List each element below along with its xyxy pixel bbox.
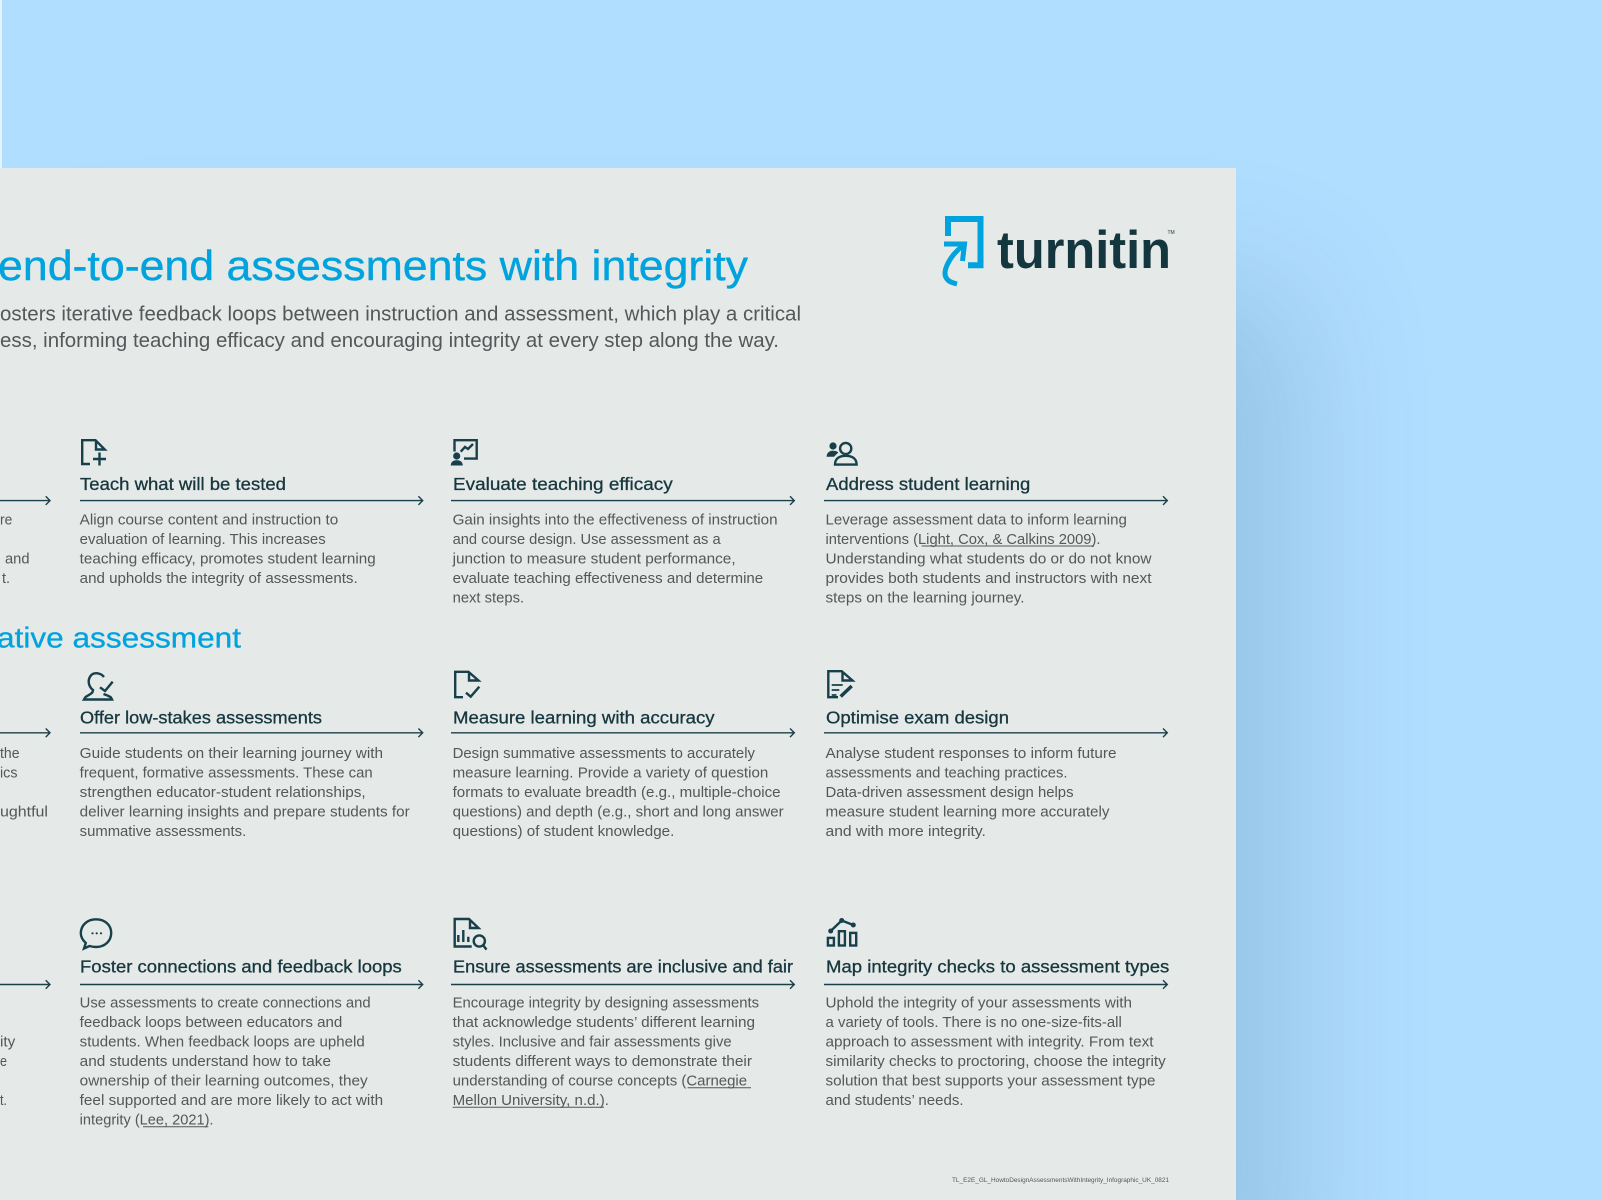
- panel: offer low-stakes assessments: [80, 673, 423, 840]
- logo: turnitin: [944, 219, 1175, 284]
- arrow: [451, 980, 794, 989]
- heading: Offer low-stakes assessments: [80, 708, 322, 728]
- body text: integrity (Lee, 2021).: [80, 1112, 214, 1128]
- panel: clipped left column row 1: re: [0, 512, 12, 528]
- body text: interventions (Light, Cox, & Calkins 2009).: [826, 532, 1100, 548]
- body text: a variety of tools. There is no one-size-fits-all: [826, 1015, 1122, 1031]
- body text: strengthen educator-student relationships,: [80, 785, 366, 801]
- panel: measure learning with accuracy: [451, 672, 794, 840]
- body text: feel supported and are more likely to act with: [80, 1093, 383, 1109]
- body text: assessments and teaching practices.: [826, 766, 1068, 782]
- body text: Mellon University, n.d.).: [453, 1093, 609, 1109]
- icon: presenter with chart: [451, 440, 477, 466]
- logo wordmark: turnitin: [997, 221, 1171, 280]
- body text: ownership of their learning outcomes, they: [80, 1074, 369, 1090]
- body text: measure student learning more accurately: [826, 804, 1110, 820]
- heading: Ensure assessments are inclusive and fair: [453, 957, 793, 977]
- body text: and upholds the integrity of assessments.: [80, 571, 358, 587]
- heading: Teach what will be tested: [80, 474, 286, 494]
- body text: next steps.: [453, 590, 524, 606]
- trademark: TM: [1168, 230, 1175, 236]
- arrow: [80, 496, 423, 505]
- body text: Uphold the integrity of your assessments with: [826, 996, 1132, 1012]
- body text: teaching efficacy, promotes student learning: [80, 551, 376, 567]
- icon: document plus: [82, 440, 106, 466]
- section heading: ative assessment: [0, 622, 241, 654]
- panel: teach what will be tested: [80, 440, 423, 587]
- body text: frequent, formative assessments. These can: [80, 766, 373, 782]
- arrow: [451, 496, 794, 505]
- icon: report with magnifier: [455, 919, 486, 950]
- left edge strip: [0, 0, 2, 168]
- body text: students different ways to demonstrate their: [453, 1054, 752, 1070]
- panel: clipped left column row 1: [0, 496, 50, 587]
- body text: and course design. Use assessment as a: [453, 532, 721, 548]
- body text: Understanding what students do or do not know: [826, 551, 1152, 567]
- logo icon: [944, 219, 980, 284]
- body text: and students understand how to take: [80, 1054, 331, 1070]
- panel: map integrity checks to assessment types: [824, 918, 1170, 1109]
- panel: ensure assessments are inclusive and fair: [451, 919, 794, 1109]
- body text: that acknowledge students’ different learning: [453, 1015, 755, 1031]
- heading: Measure learning with accuracy: [453, 708, 715, 728]
- panel: address student learning: [824, 442, 1167, 606]
- icon: bar chart with trend: [828, 918, 856, 946]
- panel: clipped left column row 2: ughtful: [0, 804, 48, 820]
- body text: [80, 996, 383, 1128]
- panel: foster connections and feedback loops: [80, 919, 423, 1128]
- body text: Analyse student responses to inform future: [826, 746, 1116, 762]
- panel: clipped left column row 3: e: [0, 1054, 7, 1070]
- heading: Evaluate teaching efficacy: [453, 474, 673, 494]
- body text: approach to assessment with integrity. From text: [826, 1034, 1154, 1050]
- body text: Guide students on their learning journey with: [80, 746, 383, 762]
- body text: [80, 746, 410, 840]
- panel: clipped left column row 2: ics: [0, 766, 18, 782]
- body text: students. When feedback loops are upheld: [80, 1034, 365, 1050]
- panel: evaluate teaching efficacy: [451, 440, 794, 606]
- body text: similarity checks to proctoring, choose the integrity: [826, 1054, 1167, 1070]
- panel: clipped left column row 1: and: [5, 551, 30, 567]
- intro text: [0, 304, 801, 352]
- body text: provides both students and instructors with next: [826, 571, 1152, 587]
- panel: clipped left column row 1: t.: [2, 571, 10, 587]
- heading: Foster connections and feedback loops: [80, 957, 402, 977]
- panel: optimise exam design: [824, 671, 1167, 840]
- body text: deliver learning insights and prepare students for: [80, 804, 410, 820]
- icon: document pencil: [828, 671, 852, 697]
- icon: speech bubble: [81, 919, 111, 948]
- panel: clipped left column row 3: [0, 980, 50, 1109]
- body text: solution that best supports your assessment type: [826, 1074, 1156, 1090]
- title: end-to-end assessments with integrity: [0, 242, 748, 289]
- body text: Leverage assessment data to inform learning: [826, 512, 1127, 528]
- arrow: [80, 980, 423, 989]
- body text: Data-driven assessment design helps: [826, 785, 1074, 801]
- footer reference code: TL_E2E_GL_HowtoDesignAssessmentsWithIntegrity_Infographic_UK_0821: [952, 1177, 1169, 1184]
- icon: two people: [826, 442, 857, 465]
- body text: [453, 746, 784, 840]
- body text: [826, 746, 1116, 840]
- body text: feedback loops between educators and: [80, 1015, 342, 1031]
- panel: clipped left column row 2: [0, 728, 50, 820]
- arrow: [451, 728, 794, 737]
- body text: junction to measure student performance,: [452, 551, 736, 567]
- icon: person with check: [84, 673, 113, 700]
- body text: evaluation of learning. This increases: [80, 532, 326, 548]
- body text: [80, 512, 376, 587]
- panel: clipped left column row 3: ity: [0, 1034, 16, 1050]
- body text: styles. Inclusive and fair assessments give: [453, 1034, 732, 1050]
- body text: [452, 512, 778, 606]
- body text: [826, 996, 1167, 1109]
- arrow: [80, 728, 423, 737]
- arrow: [824, 728, 1167, 737]
- icon: document check: [455, 672, 479, 697]
- panel: clipped left column row 2: the: [0, 746, 20, 762]
- body text: [826, 512, 1152, 606]
- body text: Gain insights into the effectiveness of instruction: [453, 512, 778, 528]
- body text: Design summative assessments to accurately: [453, 746, 756, 762]
- panel: clipped left column row 3: t.: [0, 1093, 7, 1109]
- intro text: ess, informing teaching efficacy and encouraging integrity at every step along the way.: [0, 330, 779, 352]
- body text: formats to evaluate breadth (e.g., multiple-choice: [453, 785, 781, 801]
- intro text: osters iterative feedback loops between instruction and assessment, which play a critical: [0, 304, 801, 326]
- body text: Align course content and instruction to: [80, 512, 338, 528]
- body text: Use assessments to create connections and: [80, 996, 371, 1012]
- body text: Encourage integrity by designing assessments: [453, 996, 759, 1012]
- body text: measure learning. Provide a variety of question: [453, 766, 768, 782]
- arrow: [824, 980, 1167, 989]
- body text: questions) of student knowledge.: [453, 824, 674, 840]
- body text: understanding of course concepts (Carnegie: [453, 1074, 747, 1090]
- body text: and students’ needs.: [826, 1093, 964, 1109]
- heading: Optimise exam design: [826, 708, 1009, 728]
- body text: steps on the learning journey.: [826, 590, 1024, 606]
- body text: and with more integrity.: [826, 824, 986, 840]
- arrow: [824, 496, 1167, 505]
- body text: [453, 996, 759, 1109]
- heading: Map integrity checks to assessment types: [826, 957, 1170, 977]
- body text: summative assessments.: [80, 824, 246, 840]
- heading: Address student learning: [826, 474, 1030, 494]
- body text: questions) and depth (e.g., short and long answer: [453, 804, 784, 820]
- body text: evaluate teaching effectiveness and determine: [453, 571, 763, 587]
- panel: main sheet: [0, 168, 1236, 1200]
